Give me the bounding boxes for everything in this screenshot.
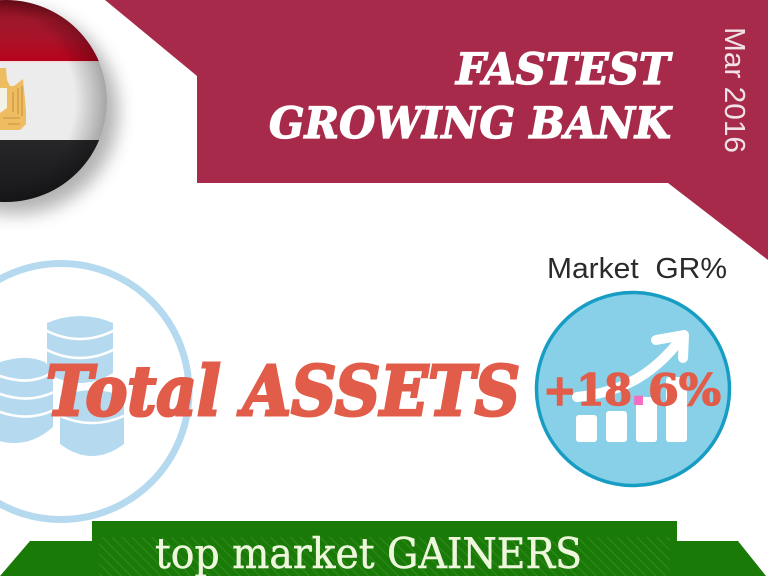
arrow xyxy=(577,335,684,397)
icon: eagle emblem xyxy=(0,68,26,130)
icon: Egypt flag button xyxy=(0,0,118,214)
value: +18.6%: +18 xyxy=(543,366,632,416)
heading: fastest growing bank: GROWING BANK xyxy=(269,99,673,149)
value: +18.6% xyxy=(543,350,721,419)
ribbon: top market gainers xyxy=(0,521,766,576)
heading: Total ASSETS: Total ASSETS xyxy=(46,352,520,432)
heading: fastest growing bank: FASTEST xyxy=(454,45,673,95)
icon: growth chart circle xyxy=(536,292,730,486)
label: Market GR%: Market GR% xyxy=(547,253,727,285)
bar chart xyxy=(576,377,687,442)
icon: coin stacks xyxy=(0,316,126,456)
banner: maroon header shape xyxy=(105,0,768,260)
date: Mar 2016: Mar 2016 xyxy=(718,27,750,153)
value: +18.6%: 6% xyxy=(648,366,721,416)
value: +18.6%: . xyxy=(630,350,647,419)
heading: fastest growing bank xyxy=(269,45,673,149)
icon: coins ring xyxy=(0,264,189,520)
